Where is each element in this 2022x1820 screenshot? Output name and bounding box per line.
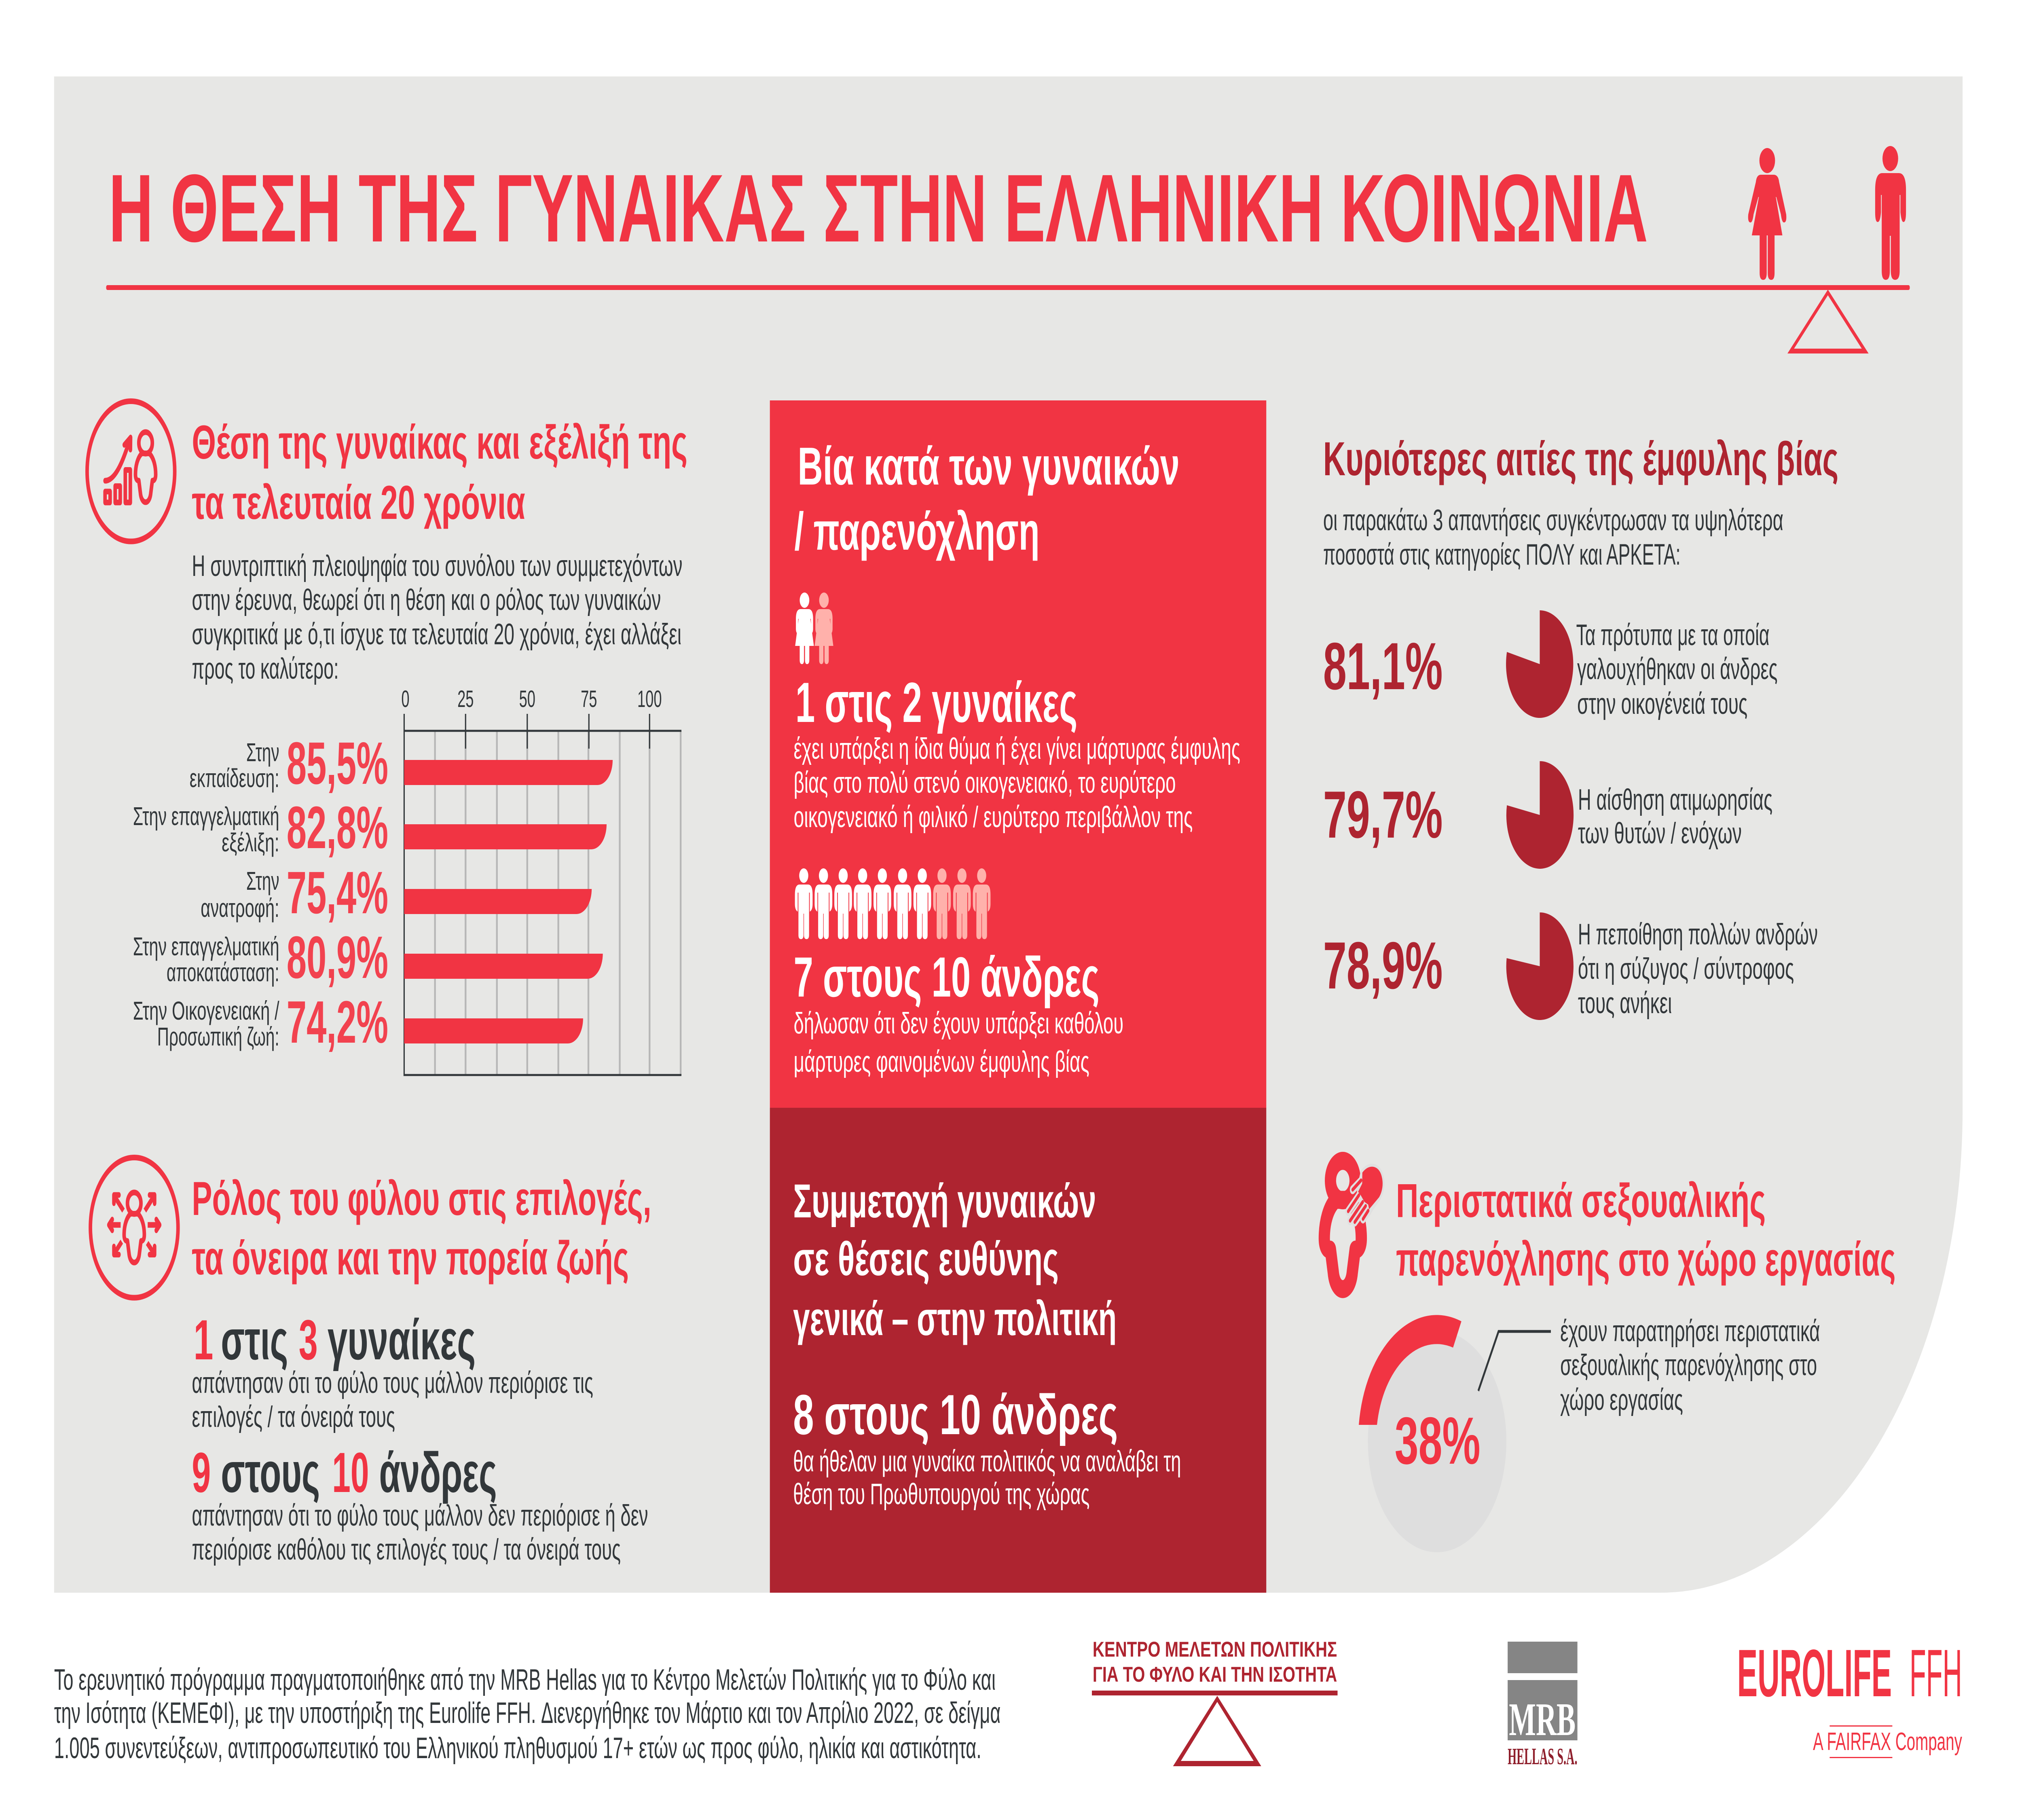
text block: harassment description: έχουν παρατηρήσει περιστατικά [1560,1314,1820,1348]
text block: no witnesses: δήλωσαν ότι δεν έχουν υπάρξει καθόλου [793,1007,1123,1040]
chart axis labels: 100 [637,686,662,712]
footer note: Το ερευνητικό πρόγραμμα πραγματοποιήθηκε από την MRB Hellas για το Κέντρο Μελετών Πολιτικής για το Φύλο και [54,1663,996,1696]
logo: Eurolife FFH: EUROLIFE [1737,1636,1892,1711]
logo: KEMEFI: ΓΙΑ ΤΟ ΦΥΛΟ ΚΑΙ ΤΗΝ ΙΣΟΤΗΤΑ [1093,1663,1337,1687]
text block: prime minister [793,1445,1181,1511]
icon: person with arrows in circle [91,1158,178,1298]
pie charts [1506,610,1574,1020]
logo: Eurolife FFH: A FAIRFAX Company [1813,1727,1962,1755]
text block: men answer: περιόρισε καθόλου τις επιλογές τους / τα όνειρά τους [192,1533,621,1566]
text block: women answer: απάντησαν ότι το φύλο τους μάλλον περιόρισε τις [192,1366,593,1399]
icon: ten men [795,868,990,939]
text block: cause descriptions: των θυτών / ενόχων [1578,817,1742,850]
chart category labels: Στην Οικογενειακή / [133,997,279,1025]
stat: 1 in 3 women: 3 [299,1308,318,1371]
text block: women answer [192,1366,593,1433]
stat: 9 in 10 men: άνδρες [379,1441,497,1504]
bar chart [401,686,681,1075]
percentages [1323,629,1443,1003]
heading: violence: / παρενόχληση [794,502,1040,561]
chart category labels: Στην [246,739,279,767]
stat: 7 in 10 men: 7 στους 10 άνδρες [793,945,1100,1009]
heading: participation: γενικά – στην πολιτική [793,1292,1117,1345]
donut chart 38%: 38% [1395,1403,1481,1478]
icon: hand on person shoulder [1324,1161,1383,1289]
callout line [1478,1331,1551,1391]
text block: intro: Η συντριπτική πλειοψηφία του συνόλου των συμμετεχόντων [192,549,682,582]
chart bars [404,760,613,1043]
text block: harassment description [1560,1314,1820,1416]
heading: role of gender: Ρόλος του φύλου στις επιλογές, [192,1172,651,1225]
logo: KEMEFI: ΚΕΝΤΡΟ ΜΕΛΕΤΩΝ ΠΟΛΙΤΙΚΗΣ [1093,1638,1337,1661]
title: Η ΘΕΣΗ ΤΗΣ ΓΥΝΑΙΚΑΣ ΣΤΗΝ ΕΛΛΗΝΙΚΗ ΚΟΙΝΩΝΙΑ [109,154,1648,262]
text block: men answer [192,1499,648,1566]
heading: violence [794,436,1180,561]
percentages: 81,1% [1323,629,1443,704]
chart category labels: Προσωπική ζωή: [157,1023,279,1051]
chart axis labels [401,686,662,712]
chart axis labels: 25 [457,686,474,712]
text block: cause descriptions [1576,618,1818,1020]
text block: cause descriptions: Τα πρότυπα με τα οποία [1576,618,1770,652]
text block: cause descriptions: Η πεποίθηση πολλών ανδρών [1578,918,1818,951]
stat: 1 in 3 women: 1 [194,1308,213,1371]
chart percentages [287,730,388,1056]
footer note [54,1663,1000,1765]
logo: KEMEFI [1092,1638,1338,1766]
chart category labels: ανατροφή: [201,894,279,923]
text block: cause descriptions: τους ανήκει [1578,986,1672,1020]
heading: participation: σε θέσεις ευθύνης [793,1232,1059,1285]
text block: women answer: επιλογές / τα όνειρά τους [192,1400,395,1433]
text block: witnesses: βίας στο πολύ στενό οικογενειακό, το ευρύτερο [793,766,1176,799]
panel: violence against women [770,400,1266,1108]
logo: Eurolife FFH: FFH [1910,1636,1962,1711]
text block: intro [192,549,683,685]
stat: 1 in 3 women: γυναίκες [328,1308,476,1371]
chart category labels: εξέλιξη: [222,829,279,857]
logo: MRB Hellas [1508,1642,1578,1769]
footer note: την Ισότητα (ΚΕΜΕΦΙ), με την υποστήριξη της Eurolife FFH. Διενεργήθηκε τον Μάρτιο και τον Απρίλιο 2022, σε δείγμα [54,1696,1000,1729]
panel: workplace harassment [1324,1161,1896,1552]
heading: position and evolution: Θέση της γυναίκας και εξέλιξή της [192,415,687,469]
stat: 9 in 10 men [192,1441,497,1504]
text block: harassment description: σεξουαλικής παρενόχλησης στο [1560,1348,1817,1382]
chart axis labels: 50 [519,686,535,712]
chart category labels: αποκατάσταση: [167,959,279,987]
text block: prime minister: θέση του Πρωθυπουργού της χώρας [793,1477,1089,1511]
percentages: 79,7% [1323,777,1443,852]
logo: Eurolife FFH [1737,1636,1962,1758]
text block: no witnesses [793,1007,1123,1078]
chart category labels: Στην επαγγελματική [133,802,279,831]
percentages: 78,9% [1323,928,1443,1003]
chart percentages: 82,8% [287,794,388,861]
chart axis labels: 75 [581,686,597,712]
stat: 9 in 10 men: 9 [192,1441,211,1504]
heading: position and evolution: τα τελευταία 20 χρόνια [192,476,525,529]
chart percentages: 74,2% [287,989,388,1056]
text block: witnesses: έχει υπάρξει η ίδια θύμα ή έχει γίνει μάρτυρας έμφυλης [793,732,1240,765]
panel: role of gender [91,1158,651,1566]
text block: witnesses: οικογενειακό ή φιλικό / ευρύτερο περιβάλλον της [793,800,1193,834]
heading: harassment [1396,1174,1896,1286]
text block: prime minister: θα ήθελαν μια γυναίκα πολιτικός να αναλάβει τη [793,1445,1181,1478]
stat: 9 in 10 men: στους [221,1441,320,1504]
panel: main causes [1323,432,1838,1020]
heading: participation: Συμμετοχή γυναικών [793,1174,1096,1227]
text block: witnesses [793,732,1240,834]
text block: cause descriptions: ότι η σύζυγος / σύντροφος [1578,952,1794,985]
text block: cause descriptions: γαλουχήθηκαν οι άνδρες [1577,652,1778,686]
chart percentages: 80,9% [287,924,388,991]
heading: role of gender [192,1172,651,1285]
text block: intro: στην έρευνα, θεωρεί ότι η θέση και ο ρόλος των γυναικών [192,583,661,616]
chart category labels: Στην επαγγελματική [133,933,279,961]
stat: 1 in 3 women: στις [221,1308,288,1371]
chart percentages: 75,4% [287,859,388,926]
panel: participation in politics [770,1108,1266,1593]
chart category labels: Στην [246,867,279,895]
chart axis labels: 0 [401,686,410,712]
chart category labels: εκπαίδευση: [190,764,279,793]
stat: 8 in 10 men: 8 στους 10 άνδρες [793,1383,1118,1446]
logo: MRB Hellas: MRB [1509,1693,1576,1745]
text block: causes intro: ποσοστά στις κατηγορίες ΠΟΛΥ και ΑΡΚΕΤΑ: [1323,538,1681,571]
donut chart 38% [1359,1315,1506,1552]
text block: cause descriptions: Η αίσθηση ατιμωρησίας [1578,783,1772,816]
stat: 9 in 10 men: 10 [332,1441,369,1504]
heading: position and evolution [192,415,687,529]
heading: violence: Βία κατά των γυναικών [797,436,1180,496]
stat: 1 in 2 women: 1 στις 2 γυναίκες [795,671,1077,734]
text block: causes intro: οι παρακάτω 3 απαντήσεις συγκέντρωσαν τα υψηλότερα [1323,504,1783,537]
chart percentages: 85,5% [287,730,388,797]
heading: role of gender: τα όνειρα και την πορεία ζωής [192,1231,629,1285]
text block: men answer: απάντησαν ότι το φύλο τους μάλλον δεν περιόρισε ή δεν [192,1499,648,1532]
icon: two women [795,593,833,664]
heading: causes: Κυριότερες αιτίες της έμφυλης βίας [1323,432,1838,485]
chart category labels [133,739,279,1051]
stat: 1 in 3 women [194,1308,476,1371]
heading: harassment: Περιστατικά σεξουαλικής [1396,1174,1766,1227]
panel: position of women [87,401,687,1075]
icon: balance scale with woman and man [106,146,1910,353]
text block: cause descriptions: στην οικογένειά τους [1577,687,1747,720]
text block: causes intro [1323,504,1783,571]
icon: chart and person in circle [87,401,175,542]
heading: harassment: παρενόχλησης στο χώρο εργασίας [1396,1232,1896,1286]
logo: MRB Hellas: HELLAS S.A. [1508,1744,1578,1769]
text block: intro: συγκριτικά με ό,τι ίσχυε τα τελευταία 20 χρόνια, έχει αλλάξει [192,618,681,651]
background panel [54,76,1963,1593]
text block: intro: προς το καλύτερο: [192,652,339,685]
text block: harassment description: χώρο εργασίας [1560,1383,1683,1416]
footer note: 1.005 συνεντεύξεων, αντιπροσωπευτικό του Ελληνικού πληθυσμού 17+ ετών ως προς φύλο, ηλικία και αστικότητα. [54,1731,981,1765]
heading: participation [793,1174,1117,1345]
text block: no witnesses: μάρτυρες φαινομένων έμφυλης βίας [793,1045,1089,1078]
